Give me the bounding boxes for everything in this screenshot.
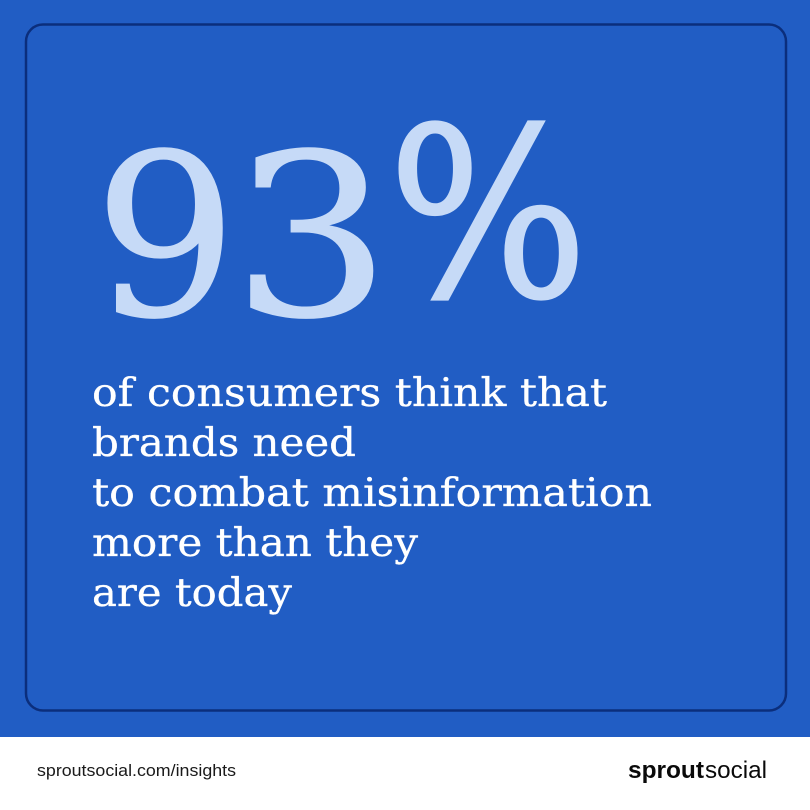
statement text: to combat misinformation <box>92 471 652 516</box>
logo: sprout social wordmark: social <box>705 757 767 784</box>
footer panel <box>0 737 810 810</box>
statement text: more than they <box>92 521 418 566</box>
statement text: of consumers think that <box>92 371 607 416</box>
big statistic: 93%: 3 <box>232 107 391 369</box>
big statistic: 93%: % <box>388 79 588 352</box>
big statistic: 93%: 9 <box>94 107 237 369</box>
logo: sprout social wordmark <box>628 757 767 784</box>
statement text: brands need <box>92 421 356 466</box>
logo: sprout social wordmark: sprout <box>628 757 704 784</box>
footer link: sproutsocial.com/insights <box>37 761 236 780</box>
statement text <box>92 371 652 616</box>
statement text: are today <box>92 571 292 616</box>
panel: rounded outline frame <box>26 24 786 710</box>
big statistic: 93% <box>94 79 588 369</box>
